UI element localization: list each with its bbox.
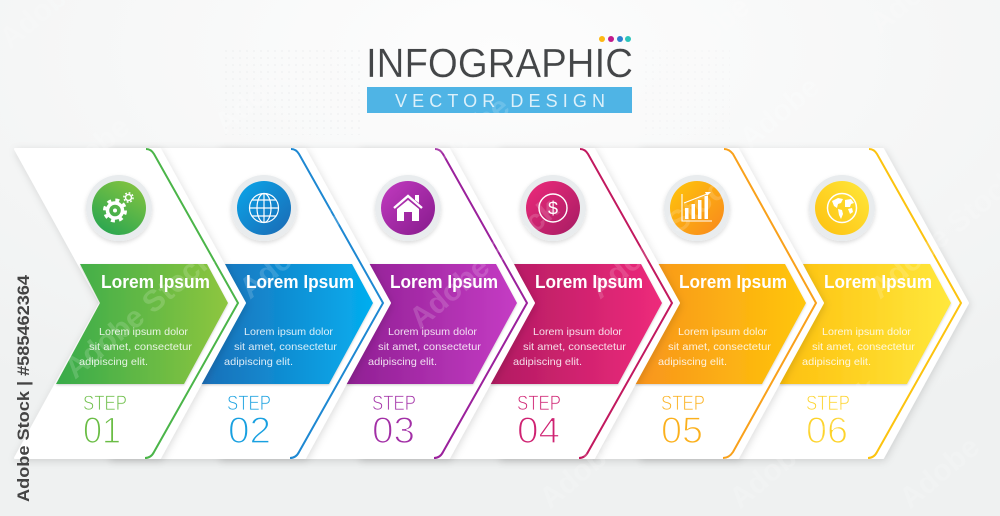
arrow line: step 6 [868,149,961,458]
text block: step 6: adipiscing elit. [802,356,871,368]
watermark: Adobe [893,430,986,515]
panel: step 1 [15,149,245,458]
heading: step 6: Lorem Ipsum [824,272,932,292]
step label: 06 [806,392,850,451]
step 3 [220,149,534,458]
step label: 04: STEP [517,392,561,415]
step label: 03: STEP [372,392,416,415]
text block: step 2: adipiscing elit. [224,356,293,368]
panel: step 5 [500,149,823,458]
text block: step 4: adipiscing elit. [513,356,582,368]
watermark: Adobe Stock [583,162,745,305]
step label: 04: 04 [517,410,560,451]
watermark: Adobe [208,55,301,140]
text block: step 3: sit amet, consectetur [378,341,482,353]
step 6 [640,149,968,458]
text block: step 1: sit amet, consectetur [89,341,193,353]
step label: 05 [661,392,705,451]
watermark: Adobe Stock [723,372,885,515]
heading: step 1: Lorem Ipsum [101,272,210,292]
step label: 02: 02 [228,410,271,451]
banner: step 6 [779,264,951,384]
arrow line: step 5 [723,149,816,458]
text block: step 3: adipiscing elit. [368,356,437,368]
text block: step 1: adipiscing elit. [79,356,148,368]
step 5 [500,149,823,458]
arrow line: step 1 [145,149,238,458]
text block: step 3: Lorem ipsum dolor [388,326,478,338]
arrow line: step 4 [579,149,672,458]
step label: 01: STEP [83,392,127,415]
text block: step 5: adipiscing elit. [658,356,727,368]
watermark: Adobe [533,430,626,515]
step label: 05: STEP [661,392,705,415]
icon: dollar coin: $ [548,198,558,218]
text block: step 4 [513,326,627,368]
step 1 [15,149,245,458]
text block: step 1: Lorem ipsum dolor [99,326,189,338]
icon: bar chart [664,175,730,241]
text block: step 2: Lorem ipsum dolor [244,326,334,338]
text block: step 1 [79,326,193,368]
heading: step 4: Lorem Ipsum [535,272,643,292]
dotted world map texture [225,45,730,135]
text block: step 5: Lorem ipsum dolor [678,326,768,338]
step label: 05: 05 [661,410,703,451]
watermark: Adobe Stock [233,162,395,305]
watermark: Adobe [423,90,516,175]
watermark: Adobe [43,110,136,195]
text block: step 5 [658,326,772,368]
heading: step 2: Lorem Ipsum [246,272,354,292]
text block: step 4: sit amet, consectetur [523,341,627,353]
step label: 03 [372,392,416,451]
text block: step 5: sit amet, consectetur [668,341,772,353]
colour dots [599,36,631,42]
step 4 [360,149,679,458]
step 2 [110,149,390,458]
text block: step 6: Lorem ipsum dolor [822,326,912,338]
step label: 02 [227,392,271,451]
step label: 03: 03 [372,410,415,451]
subtitle bar: VECTOR DESIGN [395,91,605,111]
icon: globe map [809,175,875,241]
banner: step 1 [56,264,228,384]
step label: 02: STEP [227,392,271,415]
text block: step 2: sit amet, consectetur [234,341,338,353]
step label: 06: 06 [806,410,848,451]
icon: house [375,175,441,241]
panel: step 3 [220,149,534,458]
panel: step 2 [110,149,390,458]
watermark: Adobe [733,70,826,155]
vertical stock credit: Adobe Stock | #585462364 [14,274,33,502]
arrow line: step 2 [290,149,383,458]
panel: step 6 [640,149,968,458]
banner: step 2 [201,264,373,384]
subtitle bar [367,87,632,113]
step label: 01: 01 [83,410,121,451]
heading: step 3: Lorem Ipsum [390,272,498,292]
text block: step 4: Lorem ipsum dolor [533,326,623,338]
text block: step 6 [802,326,916,368]
icon: globe [231,175,297,241]
banner: step 3 [345,264,517,384]
watermark: Adobe Stock [58,242,220,385]
watermark: Adobe Stock [403,192,565,335]
heading: step 5: Lorem Ipsum [679,272,787,292]
banner: step 5 [634,264,806,384]
title: INFOGRAPHIC [366,40,633,86]
panel: step 4 [360,149,679,458]
step label: 01 [83,392,127,451]
text block: step 6: sit amet, consectetur [812,341,916,353]
text block: step 3 [368,326,482,368]
icon: gears [86,175,152,241]
icon: dollar coin [520,175,586,241]
step label: 06: STEP [806,392,850,415]
banner: step 4 [490,264,662,384]
step label: 04 [517,392,561,451]
arrow line: step 3 [434,149,527,458]
text block: step 2 [224,326,338,368]
